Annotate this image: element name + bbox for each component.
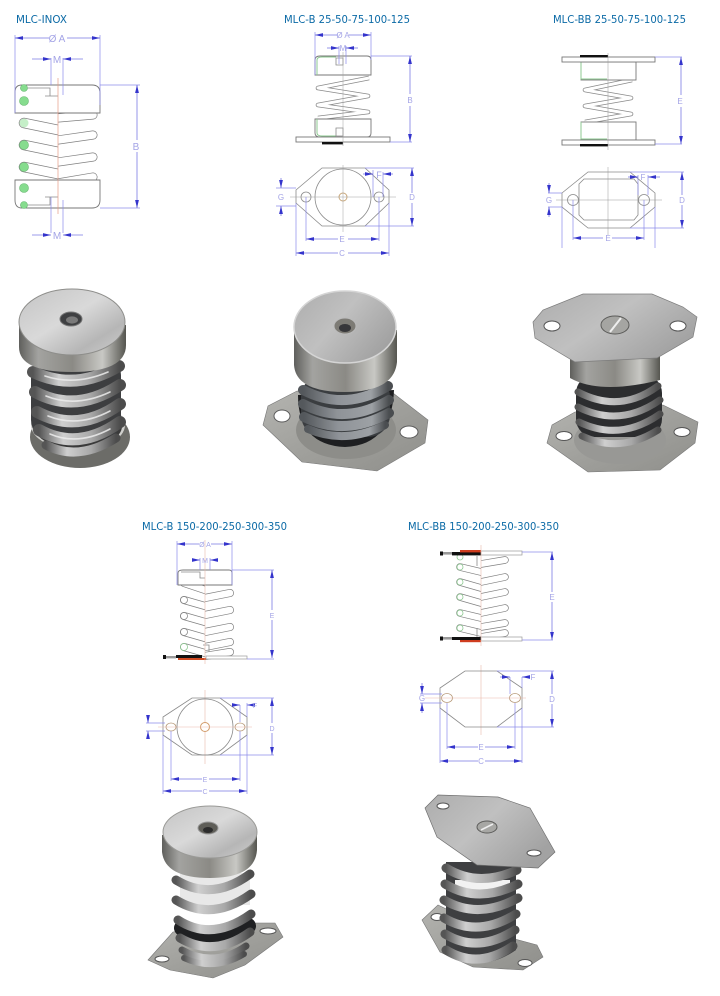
photo: MLC-B 150-350 mount: [148, 806, 283, 978]
drawing: MLC-B 150-350 section and plan: M: [202, 558, 208, 565]
drawing: MLC-B 25-125 section and plan: D: [409, 193, 415, 202]
drawing: MLC-B 25-125 section and plan: M: [340, 44, 347, 53]
drawing: MLC-BB 25-125 section and plan: D: [679, 196, 685, 205]
drawing: MLC-BB 25-125 section and plan: E: [677, 97, 683, 106]
drawing: MLC-B 150-350 section and plan: E: [203, 777, 208, 784]
title: MLC-B 150-200-250-300-350: MLC-B 150-200-250-300-350: [142, 521, 287, 533]
drawing: MLC-B 150-350 section and plan: Ø A: [199, 542, 211, 549]
drawing: MLC-INOX section: [15, 34, 140, 242]
drawing: MLC-BB 25-125 section and plan: [546, 53, 685, 248]
drawing: MLC-B 150-350 section and plan: F: [253, 703, 257, 710]
title: MLC-BB 25-50-75-100-125: MLC-BB 25-50-75-100-125: [553, 14, 686, 26]
drawing: MLC-B 25-125 section and plan: B: [407, 96, 413, 105]
drawing: MLC-BB 25-125 section and plan: F: [641, 173, 646, 182]
drawing: MLC-BB 150-350 section and plan: G: [419, 694, 425, 703]
drawing: MLC-BB 25-125 section and plan: E: [605, 234, 611, 243]
drawing: MLC-B 25-125 section and plan: F: [376, 170, 382, 180]
drawing: MLC-B 150-350 section and plan: D: [269, 726, 275, 733]
drawing: MLC-BB 150-350 section and plan: E: [478, 743, 484, 752]
drawing: MLC-INOX section: Ø A: [49, 34, 66, 45]
drawing: MLC-INOX section: M: [53, 231, 61, 242]
drawing: MLC-BB 150-350 section and plan: F: [531, 673, 536, 682]
drawing: MLC-B 25-125 section and plan: [276, 31, 415, 258]
photo: MLC-B 25-125 mount: [263, 291, 428, 471]
title: MLC-BB 150-200-250-300-350: MLC-BB 150-200-250-300-350: [408, 521, 559, 533]
drawing: MLC-BB 25-125 section and plan: G: [546, 196, 552, 205]
drawing: MLC-B 150-350 section and plan: [146, 540, 275, 796]
drawing: MLC-BB 150-350 section and plan: [419, 545, 555, 766]
drawing: MLC-BB 150-350 section and plan: E: [549, 593, 555, 602]
drawing: MLC-BB 150-350 section and plan: C: [478, 757, 484, 766]
drawing: MLC-B 150-350 section and plan: E: [270, 613, 275, 620]
photo: MLC-BB 25-125 mount: [533, 294, 698, 472]
drawing: MLC-B 25-125 section and plan: C: [339, 249, 345, 258]
photo: MLC-INOX mount: [19, 289, 130, 468]
drawing: MLC-BB 150-350 section and plan: D: [549, 695, 555, 704]
drawing: MLC-B 25-125 section and plan: Ø A: [336, 31, 350, 40]
drawing: MLC-INOX section: B: [133, 142, 140, 153]
title: MLC-INOX: MLC-INOX: [16, 14, 67, 26]
title: MLC-B 25-50-75-100-125: MLC-B 25-50-75-100-125: [284, 14, 410, 26]
drawing: MLC-INOX section: M: [53, 55, 61, 66]
drawing: MLC-B 150-350 section and plan: C: [202, 789, 208, 796]
photo: MLC-BB 150-350 mount: [422, 795, 555, 970]
drawing: MLC-B 25-125 section and plan: E: [339, 235, 345, 244]
drawing: MLC-B 25-125 section and plan: G: [278, 193, 284, 202]
